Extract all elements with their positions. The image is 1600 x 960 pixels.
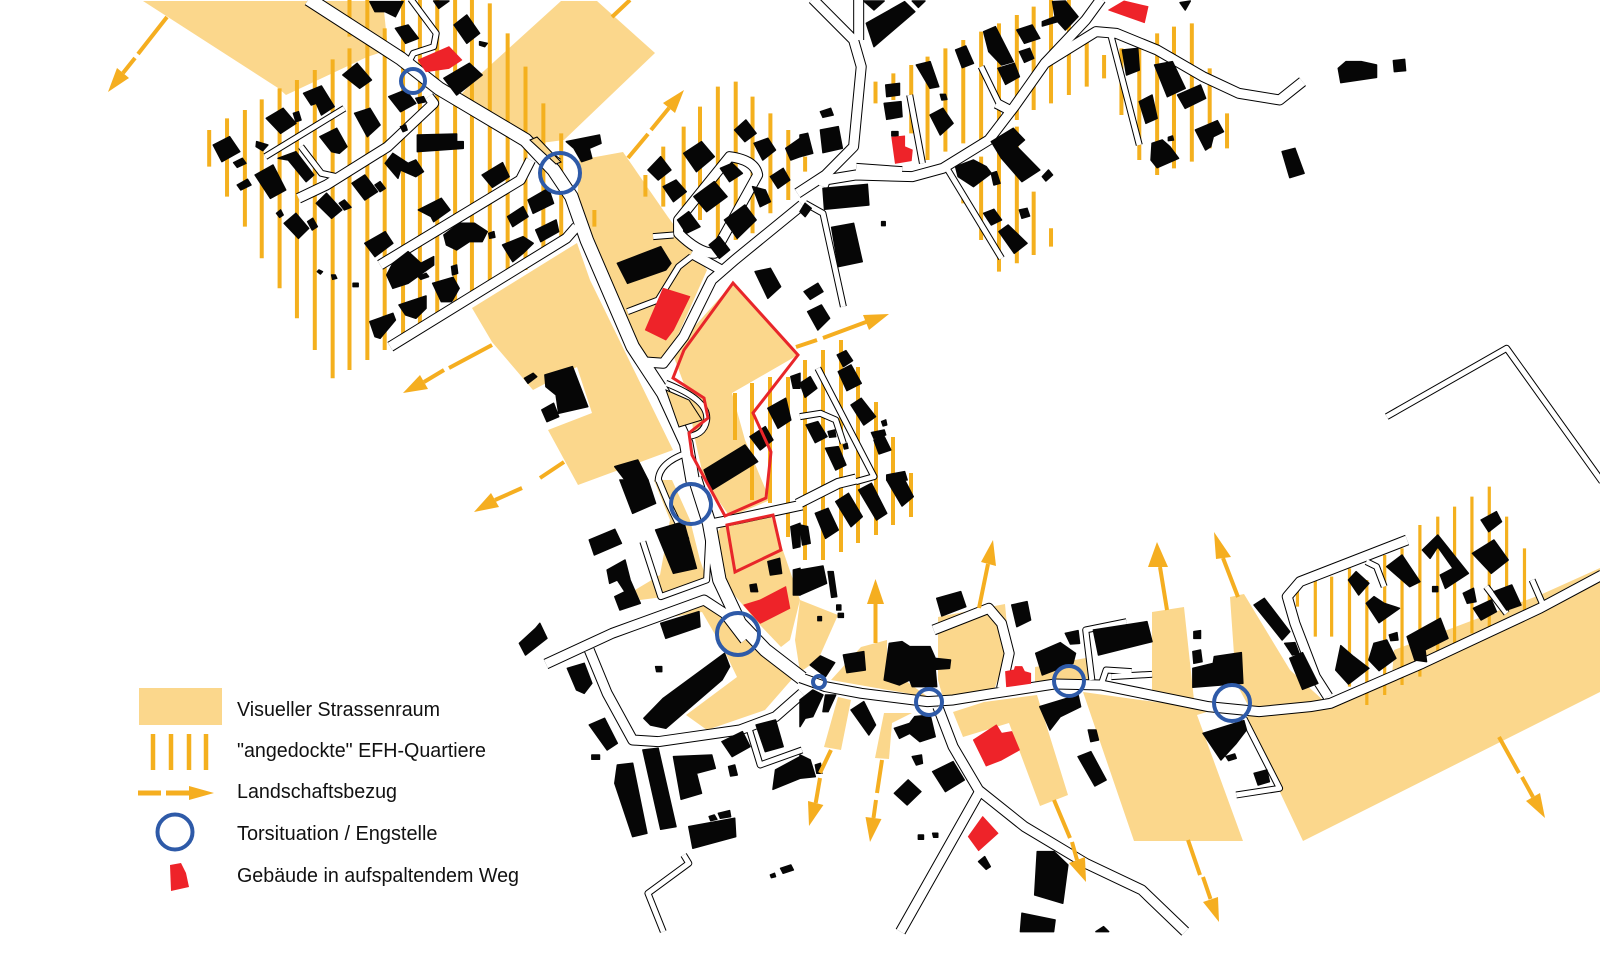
- red outline: project parcel north: [673, 283, 798, 516]
- legend label: gate circle: Torsituation / Engstelle: [237, 823, 438, 845]
- arrow north-west: [108, 17, 167, 92]
- arrow north 4: [1214, 532, 1238, 597]
- gate situations: [401, 69, 1250, 721]
- visual street space areas: [143, 1, 1600, 841]
- legend swatch: arrow: [138, 786, 214, 800]
- legend label: arrow: Landschaftsbezug: [237, 781, 397, 803]
- black buildings: [213, 1, 1521, 932]
- arrow east: [796, 314, 889, 347]
- arrow south 2: [1054, 800, 1086, 882]
- legend label: red building: Gebäude in aufspaltendem Weg: [237, 865, 519, 887]
- arrow north 3: [1148, 542, 1168, 610]
- arrow north 1: [979, 540, 996, 608]
- legend label: hatching: "angedockte" EFH-Quartiere: [237, 740, 486, 762]
- arrow south-west upper: [403, 345, 492, 393]
- arrow north 2: [867, 579, 884, 643]
- arrow north-east upper: [628, 90, 684, 158]
- traffic islands: [530, 137, 702, 427]
- arrow south 4: [808, 750, 831, 826]
- red buildings in splitting road: [418, 1, 1148, 851]
- arrow south 1: [1188, 840, 1219, 922]
- legend swatch: red building: [170, 863, 189, 891]
- docked single-family housing hatching: [209, 0, 1524, 705]
- legend swatch: gate circle: [158, 814, 192, 850]
- legend swatch: street space: [139, 688, 222, 725]
- red outline: project parcel south: [727, 515, 781, 572]
- arrow top edge: [612, 0, 630, 17]
- arrow south-west lower: [474, 462, 564, 512]
- legend swatch: hatching: [153, 734, 206, 770]
- legend: [138, 688, 519, 891]
- arrow south 3: [866, 760, 882, 842]
- legend label: street space: Visueller Strassenraum: [237, 699, 440, 721]
- arrow south-east: [1499, 737, 1545, 818]
